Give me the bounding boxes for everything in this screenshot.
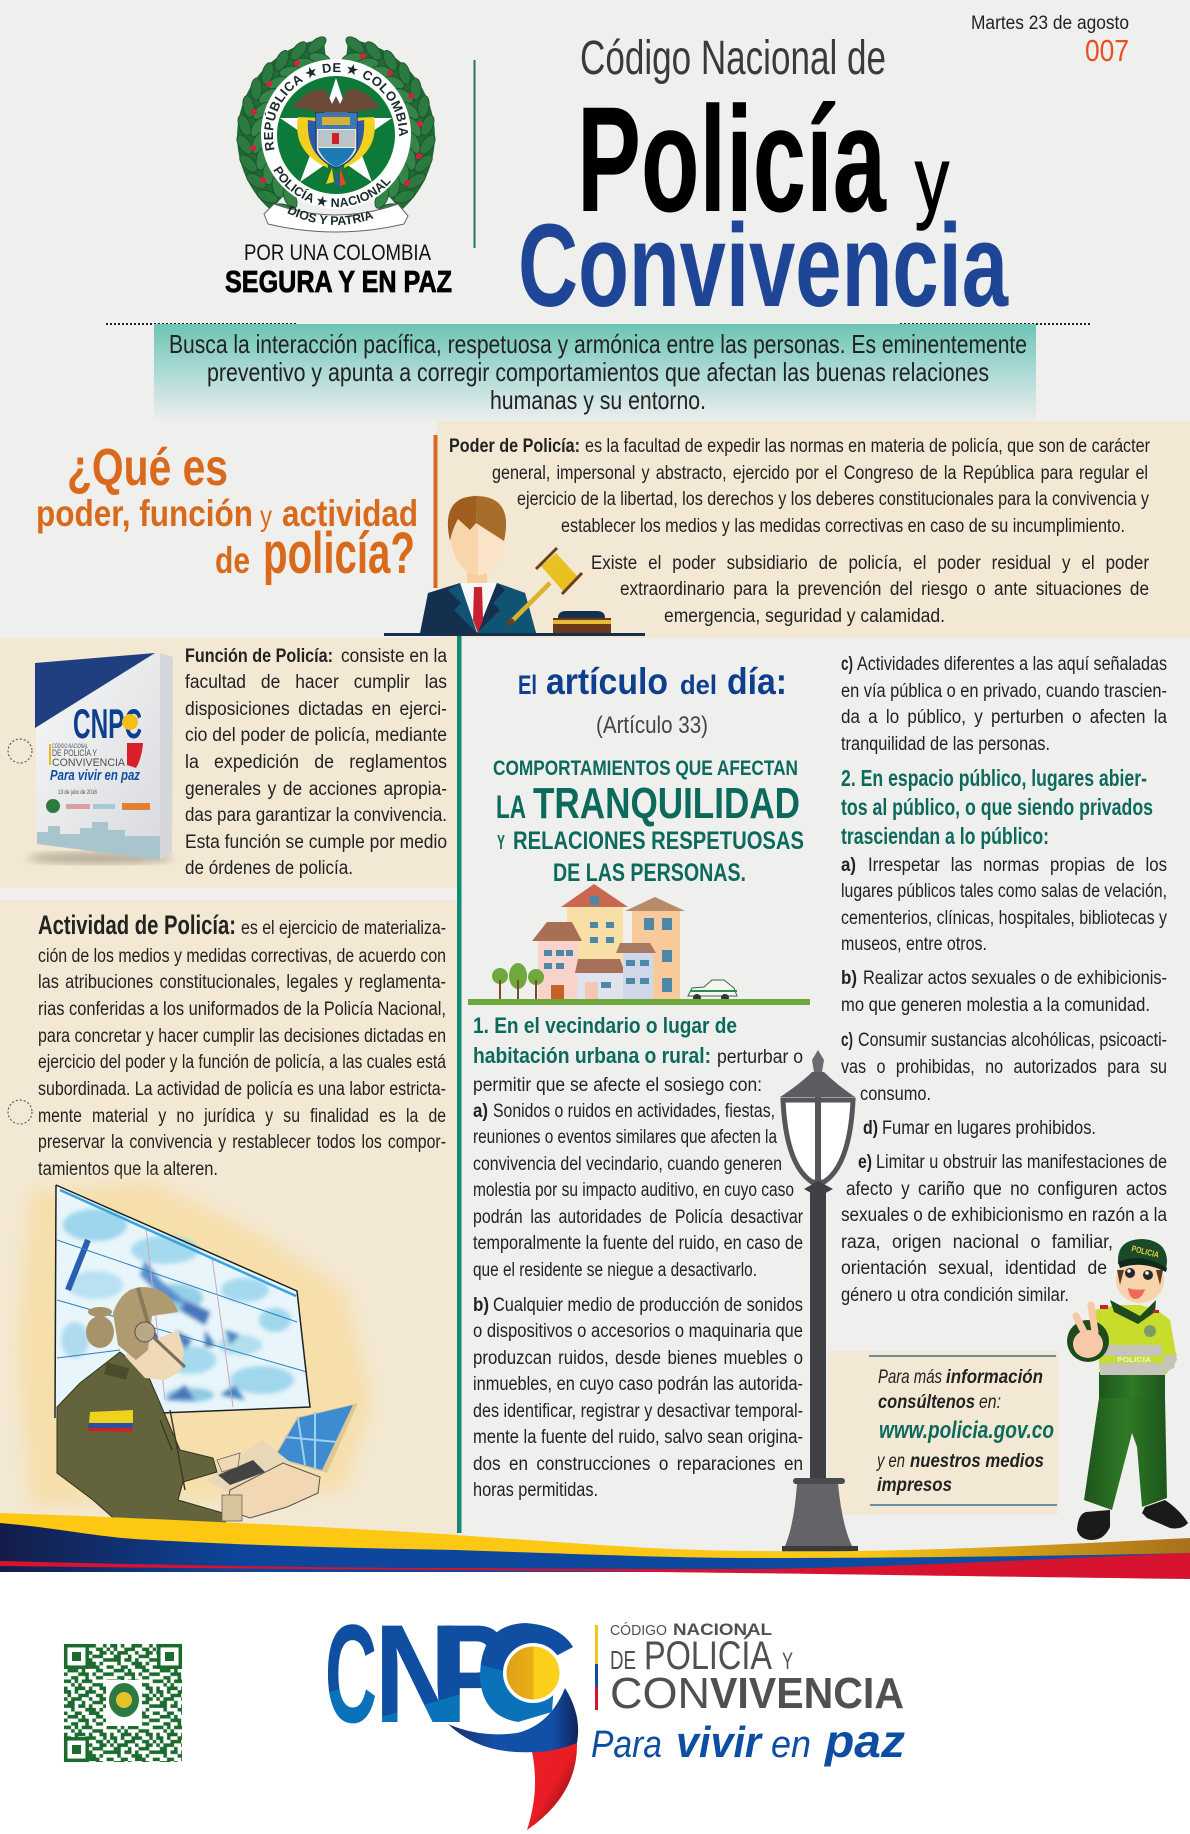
text: section 1: 1. En el vecindario o lugar de [473, 1013, 737, 1038]
text: section 1: que el residente se niegue a desactivarlo. [473, 1260, 757, 1281]
heading: comportamientos: LA [496, 789, 526, 825]
text: section 1: dos en construcciones o reparaciones en [473, 1454, 803, 1475]
hand and watch [227, 1463, 320, 1518]
panel: actividad de policía: ejercicio del poder y la función de policía, a las cuales está [38, 1052, 446, 1073]
heading: el artículo del día: El [518, 670, 537, 700]
text: item c and section 2: Fumar en lugares prohibidos. [882, 1118, 1096, 1139]
trousers [1084, 1398, 1167, 1510]
panel: actividad de policía: rias conferidas a los uniformados de la Policía Nacional, [38, 999, 446, 1020]
text: section 1: Cualquier medio de producción de sonidos [493, 1295, 803, 1316]
waving hand [1067, 1305, 1109, 1362]
officer head [125, 1330, 184, 1380]
callout: more information [828, 1351, 1058, 1515]
officer body [57, 1352, 226, 1526]
title: Código Nacional de [580, 32, 886, 85]
panel: actividad de policía: subordinada. La actividad de policía es una labor estricta- [38, 1079, 446, 1100]
logo text: código nacional de policía y convivencia: CON [610, 1669, 710, 1718]
callout: more information: Para más [878, 1367, 942, 1388]
logo text: código nacional de policía y convivencia: CÓDIGO [610, 1622, 667, 1639]
icon: police officer character: POLICIA [1117, 1357, 1151, 1364]
text: section 1: o dispositivos o accesorios o maquinaria que [473, 1321, 803, 1342]
panel: actividad de policía: para concretar y hacer cumplir las decisiones dictadas en [38, 1026, 446, 1047]
heading: qué es: policía? [263, 521, 415, 586]
text: item c and section 2 [841, 654, 1167, 1306]
flag patch [88, 1410, 133, 1432]
heading: comportamientos: TRANQUILIDAD [533, 779, 800, 828]
text: item c and section 2: a) [841, 855, 856, 876]
logo: CNPC [325, 1595, 578, 1830]
illustration: houses, trees and patrol car [468, 884, 810, 1005]
logo text: código nacional de policía y convivencia: DE [610, 1645, 636, 1675]
logo slogan: para vivir en paz: Para [591, 1724, 662, 1766]
panel: actividad de policía [0, 900, 457, 1540]
jacket [1095, 1305, 1177, 1375]
icon: police officer character [1067, 1239, 1188, 1540]
text: item c and section 2: género u otra condición similar. [841, 1285, 1069, 1306]
icon: CNPC code book [28, 653, 173, 864]
intro band: preventivo y apunta a corregir comportamientos que afectan las buenas relaciones [207, 357, 989, 387]
text: section 1: permitir que se afecte el sosiego con: [473, 1075, 762, 1096]
text: section 1: molestia por su impacto auditivo, en cuyo caso [473, 1180, 794, 1201]
text: section 1: temporalmente la fuente del ruido, en caso de [473, 1233, 803, 1254]
logo slogan: para vivir en paz: en [771, 1724, 811, 1766]
icon: national police badge [236, 36, 436, 232]
decorative flag wave [0, 1513, 1190, 1579]
heading: qué es: de [215, 540, 250, 581]
icon: national police badge: DIOS Y PATRIA [287, 206, 374, 226]
logo: CNPC: N [374, 1595, 461, 1752]
text: item c and section 2: trasciendan a lo público: [841, 823, 1049, 849]
intro band [154, 324, 1036, 421]
panel: actividad de policía: las atribuciones constitucionales, legales y reglamenta- [38, 972, 446, 993]
text: section 1: reuniones o eventos similares que afecten la [473, 1127, 777, 1148]
heading: qué es: poder, función [36, 493, 253, 534]
text: item c and section 2: c) [841, 654, 853, 675]
heading: el artículo del día: día: [727, 661, 787, 702]
icon: CNPC code book: DE POLICÍA Y [52, 748, 97, 758]
icon: CNPC code book: 13 de julio de 2016 [58, 790, 98, 796]
icon: national police badge: REPÚBLICA ★ DE ★ COLOMBIA [264, 63, 408, 151]
logo: CNPC: C [325, 1595, 377, 1752]
tablet [273, 1403, 358, 1473]
panel: actividad de policía: tamientos que la alteren. [38, 1159, 218, 1180]
logo text: código nacional de policía y convivencia [595, 1620, 904, 1718]
heading: qué es: y [260, 500, 272, 533]
QR code [64, 1644, 182, 1762]
heading: el artículo del día: del [680, 670, 717, 700]
shoes [1077, 1510, 1110, 1540]
title: Policía [577, 75, 887, 243]
icon: CNPC code book: CONVIVENCIA [52, 757, 126, 769]
callout: more information: nuestros medios [910, 1451, 1044, 1472]
slogan [225, 240, 452, 299]
panel: actividad de policía: Actividad de Policía: [38, 910, 236, 940]
panel: función de policía: facultad de hacer cumplir las [185, 672, 447, 693]
panel: función de policía: generales y de acciones apropia- [185, 779, 447, 800]
icon: police officer character: POLICIA [1131, 1243, 1160, 1260]
logo slogan: para vivir en paz [591, 1715, 905, 1767]
text: section 1: b) [473, 1295, 489, 1316]
callout: more information: información [946, 1367, 1043, 1388]
logo text: código nacional de policía y convivencia: POLICÍA [644, 1633, 772, 1678]
text: section 1: podrán las autoridades de Policía desactivar [473, 1207, 804, 1228]
heading: comportamientos: DE LAS PERSONAS. [553, 859, 746, 887]
slogan: SEGURA Y EN PAZ [225, 264, 452, 299]
panel: función de policía: de órdenes de policía. [185, 858, 353, 879]
heading: comportamientos: COMPORTAMIENTOS QUE AFECTAN [493, 757, 798, 780]
icon: national police badge: POLICÍA ★ NACIONAL [273, 166, 391, 208]
panel: poder de policía: emergencia, seguridad y calamidad. [664, 606, 945, 627]
callout: more information: www.policia.gov.co [879, 1417, 1054, 1444]
text: section 1: a) [473, 1101, 488, 1122]
heading: comportamientos [493, 757, 804, 887]
text: section 1: habitación urbana o rural: [473, 1043, 711, 1068]
text: item c and section 2: tranquilidad de las personas. [841, 734, 1050, 755]
icon: CNPC code book: Para vivir en paz [50, 767, 140, 784]
text: section 1 [473, 1013, 804, 1501]
text: section 1: mente la fuente del ruido, salvo sean origina- [473, 1427, 803, 1448]
panel: función de policía: Función de Policía: [185, 646, 333, 667]
text: section 1: horas permitidas. [473, 1480, 598, 1501]
text: item c and section 2: b) [841, 968, 857, 989]
panel: función de policía: la expedición de reglamentos [185, 752, 447, 773]
text: section 1: produzcan ruidos, desde bienes muebles o [473, 1348, 803, 1369]
heading: qué es [36, 439, 418, 586]
video wall [55, 1185, 310, 1418]
panel: función de policía: das para garantizar la convivencia. [185, 805, 447, 826]
text: item c and section 2: d) [863, 1118, 878, 1139]
paper and keyboard [207, 1440, 290, 1500]
text: section 1: convivencia del vecindario, cuando generen [473, 1154, 782, 1175]
date and edition number: Martes 23 de agosto [971, 13, 1129, 34]
heading: el artículo del día [518, 661, 787, 739]
illustration: police officer at monitoring center [18, 1182, 372, 1526]
text: item c and section 2: consumo. [860, 1084, 931, 1105]
callout: more information: consúltenos [878, 1392, 975, 1413]
slogan: POR UNA COLOMBIA [244, 240, 431, 265]
logo text: código nacional de policía y convivencia: VIVENCIA [710, 1669, 904, 1718]
logo slogan: para vivir en paz: vivir [676, 1718, 764, 1767]
date and edition number [971, 13, 1129, 68]
text: item c and section 2: e) [858, 1152, 872, 1173]
panel: poder de policía: extraordinario para la prevención del riesgo o ante situaciones de [620, 579, 1149, 600]
panel: función de policía: consiste en la [341, 646, 447, 667]
logo text: código nacional de policía y convivencia: NACIONAL [673, 1620, 772, 1639]
text: item c and section 2: raza, origen nacional o familiar, [841, 1232, 1113, 1253]
panel: actividad de policía: mente material y no jurídica y su finalidad es la de [38, 1106, 446, 1127]
title: y [915, 129, 949, 231]
icon: judge with gavel [384, 495, 645, 636]
heading: el artículo del día: (Artículo 33) [596, 712, 708, 739]
heading: qué es: actividad [282, 493, 418, 534]
logo slogan: para vivir en paz: paz [823, 1715, 905, 1767]
callout: more information: y en [875, 1451, 905, 1472]
logo text: código nacional de policía y convivencia: Y [782, 1648, 793, 1675]
panel: función de policía [0, 638, 457, 888]
title [518, 32, 1009, 332]
icon: CNPC code book: CNPC [73, 700, 142, 747]
panel: función de policía: cio del poder de policía, mediante [185, 725, 447, 746]
callout: more information: en: [979, 1392, 1001, 1413]
panel: actividad de policía: ción de los medios y medidas correctivas, de acuerdo con [38, 946, 446, 967]
icon: CNPC code book: CÓDIGO NACIONAL [52, 743, 88, 750]
heading: qué es: ¿Qué es [67, 439, 228, 497]
intro band: humanas y su entorno. [490, 385, 706, 415]
text: item c and section 2: orientación sexual, identidad de [841, 1258, 1107, 1279]
panel: función de policía: disposiciones dictadas en ejerci- [185, 699, 447, 720]
panel: actividad de policía: es el ejercicio de materializa- [241, 918, 446, 939]
panel: poder de policía [434, 421, 1190, 638]
panel: función de policía: Esta función se cumple por medio [185, 832, 447, 853]
date and edition number: 007 [1085, 33, 1129, 68]
cap [1118, 1239, 1167, 1270]
text: section 1: inmuebles, en cuyo caso podrán las autorida- [473, 1374, 803, 1395]
heading: comportamientos: RELACIONES RESPETUOSAS [513, 827, 804, 855]
icon: street lamp [780, 1050, 858, 1552]
heading: comportamientos: Y [497, 832, 505, 854]
text: item c and section 2: c) [841, 1030, 853, 1051]
panel: actividad de policía: preservar la convivencia y restablecer todos los compor- [38, 1132, 446, 1153]
text: section 1: perturbar o [717, 1047, 803, 1068]
panel: poder de policía: Poder de Policía: [449, 436, 580, 457]
logo: CNPC: P [437, 1595, 509, 1752]
heading: el artículo del día: artículo [546, 661, 668, 702]
callout: more information: impresos [877, 1475, 952, 1496]
text: section 1: des identificar, registrar y desactivar temporal- [473, 1401, 803, 1422]
face [1116, 1257, 1164, 1303]
text: item c and section 2: museos, entre otros. [841, 934, 987, 955]
text: section 1: Sonidos o ruidos en actividades, fiestas, [493, 1101, 775, 1122]
text: item c and section 2: mo que generen molestia a la comunidad. [841, 995, 1150, 1016]
gavel [508, 548, 611, 633]
